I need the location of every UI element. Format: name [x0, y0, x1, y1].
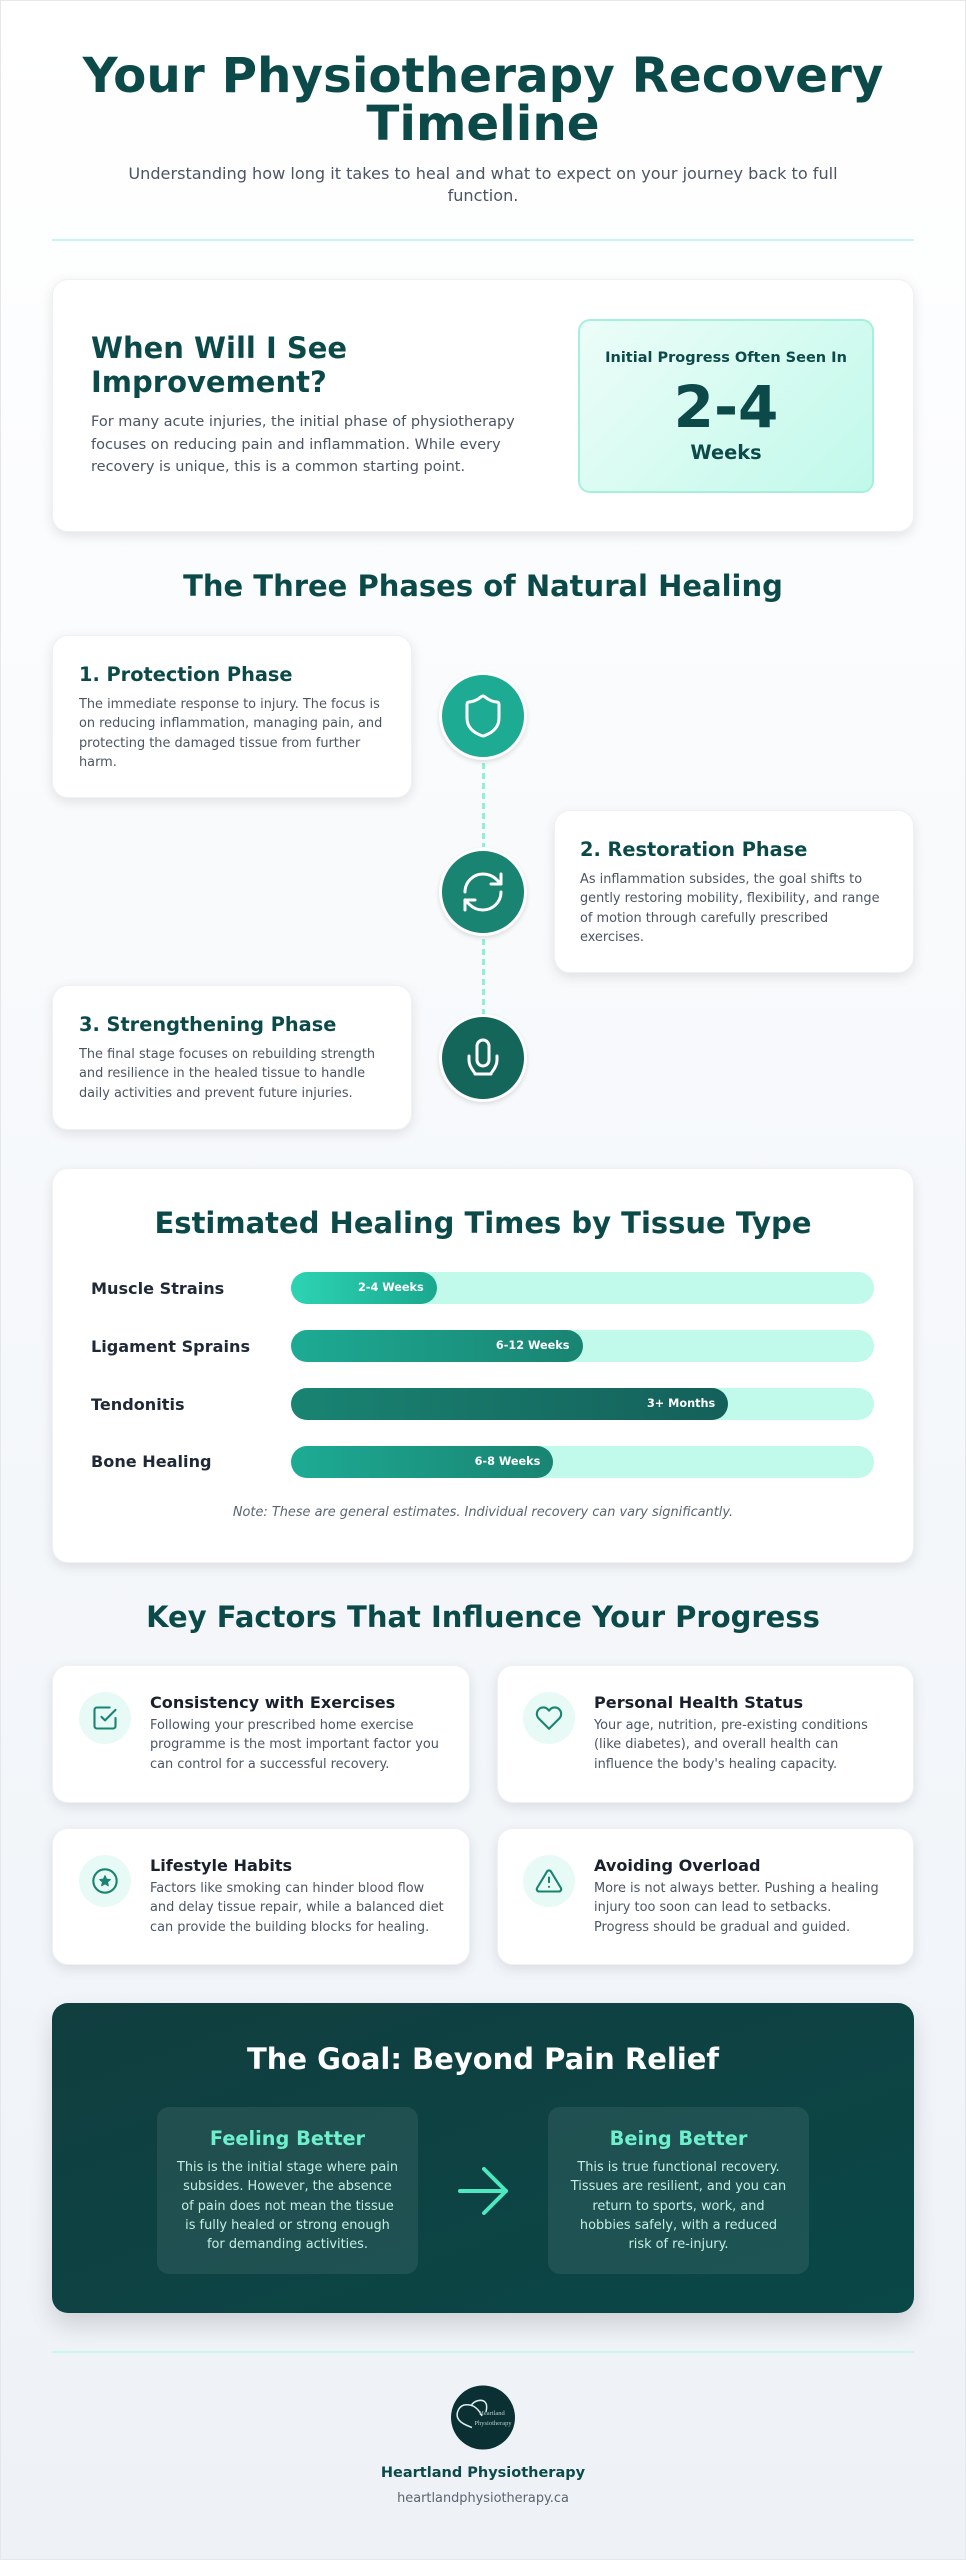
subtitle: Understanding how long it takes to heal and what to expect on your journey back to full — [128, 164, 838, 183]
factor text: programme is the most important factor you — [150, 1737, 439, 1752]
panel: the goal — [52, 2003, 914, 2313]
icon: star in circle — [79, 1855, 131, 1907]
phase 1 text: on reducing inflammation, managing pain, and — [79, 716, 382, 731]
box text: hobbies safely, with a reduced — [580, 2218, 777, 2233]
text block: recovery is unique, this is a common starting point. — [91, 459, 465, 475]
icon: check square — [79, 1692, 131, 1744]
heading: Improvement? — [91, 365, 327, 399]
heading: key factors: Key Factors That Influence Your Progress — [146, 1600, 820, 1634]
box text: return to sports, work, and — [592, 2199, 765, 2214]
phase 1 heading: 1. Protection Phase — [79, 663, 293, 686]
factor text: Following your prescribed home exercise — [150, 1718, 414, 1733]
row: tendonitis — [91, 1388, 874, 1420]
phase 3 text: daily activities and prevent future injuries. — [79, 1086, 353, 1101]
goal heading: The Goal: Beyond Pain Relief — [247, 2042, 719, 2076]
factor text: Progress should be gradual and guided. — [594, 1920, 850, 1935]
phase 3 text — [78, 1047, 375, 1101]
connector 2 — [482, 939, 484, 1015]
box: being better — [548, 2107, 809, 2274]
logo: Physiotherapy — [474, 2420, 512, 2427]
factor text: injury too soon can lead to setbacks. — [594, 1900, 831, 1915]
footer url: heartlandphysiotherapy.ca — [397, 2491, 569, 2506]
icon: shield — [439, 672, 527, 760]
heading — [91, 331, 347, 399]
box text: This is the initial stage where pain — [177, 2160, 398, 2175]
title: Timeline — [366, 96, 600, 152]
phase 2 text: As inflammation subsides, the goal shifts to — [580, 872, 862, 887]
factor text: More is not always better. Pushing a healing — [594, 1881, 879, 1896]
box: feeling better — [157, 2107, 418, 2274]
panel: phase 2 — [554, 810, 914, 973]
phase 2 text — [580, 872, 880, 945]
panel: phase 3 — [52, 985, 412, 1130]
phase 1 text: protecting the damaged tissue from further — [79, 736, 360, 751]
box text: for demanding activities. — [207, 2237, 368, 2252]
connector 1 — [482, 763, 484, 847]
factor text: and delay tissue repair, while a balanced diet — [150, 1900, 444, 1915]
icon: warning triangle — [523, 1855, 575, 1907]
panel: overload — [497, 1828, 914, 1965]
text block: For many acute injuries, the initial phase of physiotherapy — [91, 414, 515, 430]
factor text: can provide the building blocks for healing. — [150, 1920, 429, 1935]
factor text — [150, 1718, 439, 1772]
row: ligament sprains: 6-12 Weeks — [496, 1339, 570, 1352]
title — [82, 48, 883, 152]
row: bone healing: 6-8 Weeks — [475, 1455, 540, 1468]
factor text — [594, 1881, 879, 1935]
heading: three phases: The Three Phases of Natural Healing — [183, 569, 783, 603]
panel: phase 1 — [52, 635, 412, 798]
callout: 2-4 weeks: 2-4 — [674, 373, 778, 441]
box text: This is true functional recovery. — [577, 2160, 780, 2175]
phase 2 text: exercises. — [580, 930, 644, 945]
chart heading: Estimated Healing Times by Tissue Type — [154, 1206, 812, 1240]
factor heading: Avoiding Overload — [594, 1856, 761, 1875]
subtitle — [128, 164, 838, 205]
callout: 2-4 weeks: Weeks — [690, 441, 762, 464]
panel: healing times chart — [52, 1168, 914, 1563]
factor text: (like diabetes), and overall health can — [594, 1737, 838, 1752]
box text — [176, 2160, 398, 2252]
text block: focuses on reducing pain and inflammation. While every — [91, 436, 501, 452]
phase 2 heading: 2. Restoration Phase — [580, 838, 807, 861]
row: tendonitis: Tendonitis — [91, 1395, 185, 1414]
box heading: Feeling Better — [210, 2127, 365, 2150]
box text — [570, 2160, 786, 2252]
row: muscle strains: Muscle Strains — [91, 1279, 224, 1298]
factor text: Factors like smoking can hinder blood flow — [150, 1881, 424, 1896]
subtitle: function. — [448, 186, 518, 205]
row: bone healing — [91, 1446, 874, 1478]
box heading: Being Better — [610, 2127, 747, 2150]
panel: personal health — [497, 1665, 914, 1803]
row: muscle strains: 2-4 Weeks — [358, 1281, 424, 1294]
panel: lifestyle — [52, 1828, 470, 1965]
factor heading: Personal Health Status — [594, 1693, 803, 1712]
row: ligament sprains — [91, 1330, 874, 1362]
factor text — [150, 1881, 444, 1935]
arrow — [458, 2167, 508, 2216]
row: muscle strains — [91, 1272, 874, 1304]
panel: consistency — [52, 1665, 470, 1803]
row: ligament sprains: Ligament Sprains — [91, 1337, 250, 1356]
icon: heart — [523, 1692, 575, 1744]
icon: microphone — [439, 1014, 527, 1102]
factor text: can control for a successful recovery. — [150, 1757, 389, 1772]
box text: risk of re-injury. — [628, 2237, 728, 2252]
factor heading: Lifestyle Habits — [150, 1856, 292, 1875]
phase 1 text — [78, 697, 382, 770]
phase 3 heading: 3. Strengthening Phase — [79, 1013, 336, 1036]
icon: refresh — [439, 848, 527, 936]
factor text — [594, 1718, 868, 1772]
phase 3 text: and resilience in the healed tissue to handle — [79, 1066, 365, 1081]
callout: 2-4 weeks: Initial Progress Often Seen In — [605, 350, 847, 366]
factor heading: Consistency with Exercises — [150, 1693, 395, 1712]
phase 1 text: The immediate response to injury. The focus is — [79, 697, 380, 712]
row: bone healing: Bone Healing — [91, 1452, 212, 1471]
factor text: Your age, nutrition, pre-existing conditions — [594, 1718, 868, 1733]
box text: Tissues are resilient, and you can — [571, 2179, 786, 2194]
note: Note: These are general estimates. Individual recovery can vary significantly. — [233, 1505, 733, 1520]
footer name: Heartland Physiotherapy — [381, 2465, 585, 2481]
row: tendonitis: 3+ Months — [647, 1397, 715, 1410]
phase 2 text: gently restoring mobility, flexibility, and range — [580, 891, 880, 906]
phase 2 text: of motion through carefully prescribed — [580, 911, 828, 926]
title: Your Physiotherapy Recovery — [83, 48, 883, 104]
phase 3 text: The final stage focuses on rebuilding strength — [79, 1047, 375, 1062]
factor text: influence the body's healing capacity. — [594, 1757, 837, 1772]
callout: 2-4 weeks — [578, 319, 874, 493]
heading: When Will I See — [91, 331, 347, 365]
panel: when will I see improvement — [52, 279, 914, 532]
box text: subsides. However, the absence — [183, 2179, 392, 2194]
box text: is fully healed or strong enough — [185, 2218, 390, 2233]
phase 1 text: harm. — [79, 755, 117, 770]
logo — [451, 2386, 515, 2450]
logo: Heartland — [479, 2410, 506, 2417]
box text: of pain does not mean the tissue — [181, 2199, 394, 2214]
text block — [91, 414, 515, 475]
